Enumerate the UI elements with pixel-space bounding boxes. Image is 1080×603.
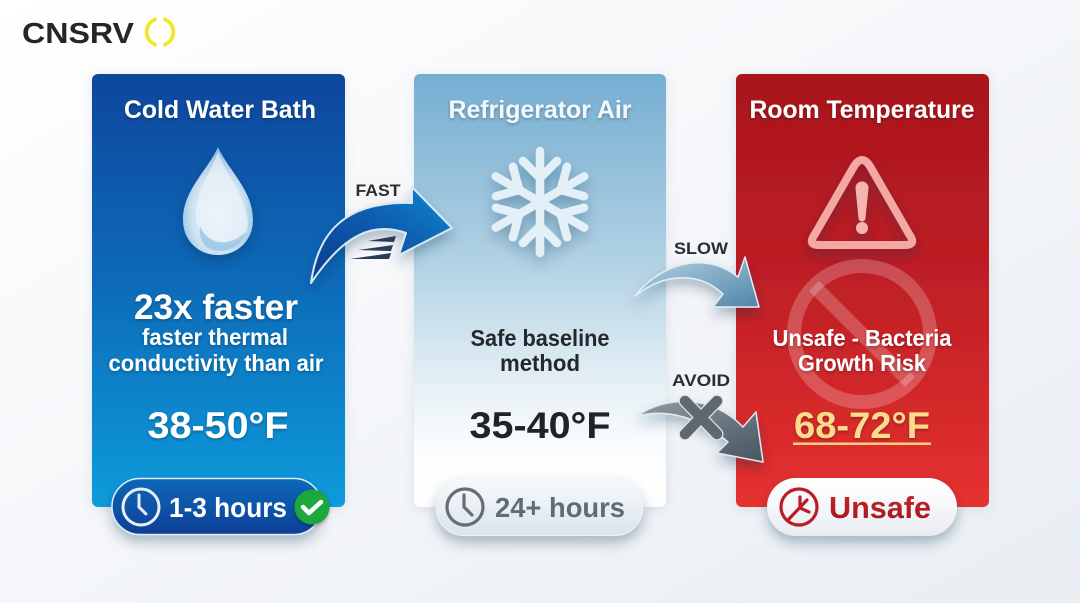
heading: cold water bath: Cold Water Bath [124, 96, 316, 124]
description: bacteria growth risk [772, 325, 952, 376]
icon: x mark [685, 401, 717, 434]
heading: refrigerator air: Refrigerator Air [448, 96, 632, 124]
icon: water drop [183, 147, 253, 255]
pill: 1-3 hours [112, 478, 330, 534]
logo: CNSRV [22, 18, 135, 50]
arrow: fast [311, 175, 452, 283]
icon: clock [123, 489, 159, 525]
pill: unsafe [767, 478, 957, 536]
temperature: 68-72°F: 68-72°F [794, 405, 930, 446]
icon: clock [447, 489, 483, 525]
description: bacteria growth risk: Unsafe - Bacteria [772, 325, 952, 351]
duration text: 1-3 hours [169, 492, 287, 523]
panel: room temperature [736, 74, 989, 507]
temperature: 38-50°F: 38-50°F [148, 405, 288, 446]
speed lines [350, 236, 396, 259]
heading: room temperature: Room Temperature [750, 96, 975, 124]
description: safe baseline method: method [500, 350, 580, 376]
icon: prohibition sign [794, 266, 930, 402]
description: bacteria growth risk: Growth Risk [798, 350, 926, 376]
arrow: avoid [637, 371, 763, 462]
icon: warning triangle [812, 160, 912, 245]
duration text: 24+ hours [495, 492, 625, 523]
label: slow: SLOW [674, 239, 729, 258]
pill: 24+ hours [436, 478, 643, 536]
logo [22, 18, 173, 50]
description: thermal conductivity: faster thermal [142, 324, 288, 350]
description: safe baseline method: Safe baseline [470, 325, 610, 351]
arrow: slow [635, 239, 759, 307]
panel: cold water bath [92, 74, 345, 507]
description: thermal conductivity [108, 324, 324, 376]
label: avoid: AVOID [672, 371, 730, 390]
icon: snowflake [487, 151, 593, 253]
icon: green check [294, 490, 330, 524]
panel: refrigerator air [414, 74, 666, 507]
label: fast: FAST [356, 181, 401, 200]
description: thermal conductivity: conductivity than air [108, 350, 324, 376]
icon: prohibited clock [781, 489, 817, 525]
description: safe baseline method [470, 325, 610, 376]
temperature: 35-40°F: 35-40°F [470, 405, 610, 446]
status text: Unsafe [829, 490, 931, 525]
stat: 23x faster: 23x faster [134, 288, 298, 327]
